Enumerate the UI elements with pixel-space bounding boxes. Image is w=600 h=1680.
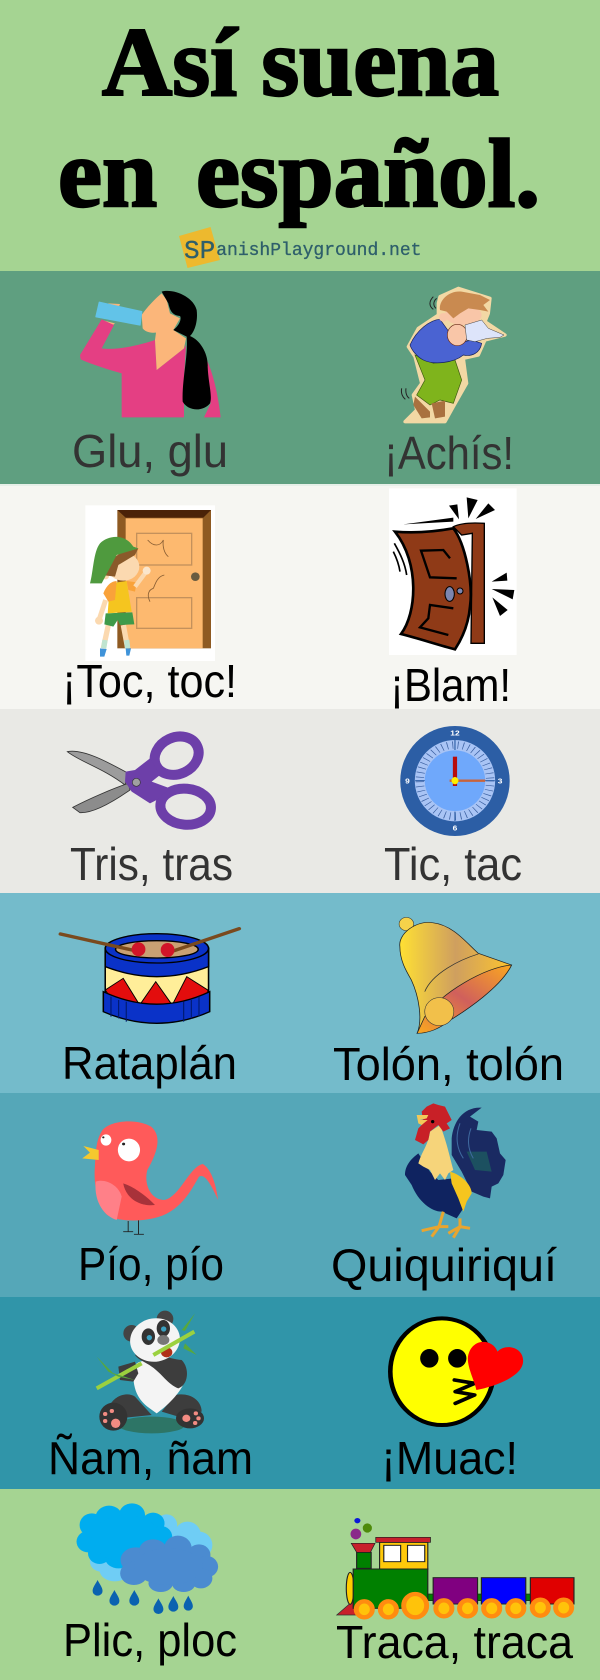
label: Tolón, tolón: Tolón, tolón: [333, 1038, 564, 1090]
panel: row 4 drum and bell: [0, 893, 600, 1093]
icon: drum: [60, 929, 239, 1023]
title: en español.: [58, 120, 540, 228]
panel: row 3 scissors and clock: [0, 709, 600, 893]
panel: row 1 drinking and sneezing: [0, 271, 600, 486]
icon: clock: 3: [498, 777, 503, 785]
icon: toy train: [337, 1518, 574, 1617]
icon: red bird: [82, 1121, 218, 1234]
logo: SpanishPlayground.net: anishPlayground.net: [216, 241, 421, 261]
panel: row 6 panda and kiss: [0, 1297, 600, 1489]
icon: rooster: [405, 1103, 506, 1238]
label: Plic, ploc: Plic, ploc: [63, 1614, 237, 1666]
panel: row 2 knocking and slamming: [0, 486, 600, 711]
label: Tris, tras: Tris, tras: [70, 838, 233, 890]
icon: boy knocking on a door: [85, 505, 215, 661]
icon: scissors: [67, 729, 212, 827]
title: [58, 9, 540, 228]
panel: row 5 bird and rooster: [0, 1093, 600, 1297]
logo: SpanishPlayground.net: SP: [184, 236, 215, 266]
panel: row 7 rain and train: [0, 1489, 600, 1680]
logo: SpanishPlayground.net: [179, 227, 421, 268]
icon: clock: 6: [453, 824, 458, 833]
title: Así suena: [102, 9, 499, 117]
label: Rataplán: Rataplán: [62, 1037, 237, 1089]
label: ¡Blam!: ¡Blam!: [390, 659, 511, 711]
icon: boy sneezing: [401, 288, 505, 422]
label: ¡Achís!: ¡Achís!: [384, 427, 514, 479]
icon: clock: [400, 726, 510, 836]
icon: panda eating bamboo: [97, 1311, 204, 1433]
icon: door slamming: [389, 488, 517, 655]
label: Quiquiriquí: Quiquiriquí: [331, 1239, 557, 1291]
icon: woman drinking from a bottle: [80, 291, 221, 417]
icon: clock: 9: [405, 777, 411, 785]
icon: bell: [399, 917, 512, 1033]
icon: clock: 12: [450, 729, 460, 738]
label: Ñam, ñam: Ñam, ñam: [48, 1432, 253, 1484]
label: Pío, pío: Pío, pío: [78, 1238, 224, 1290]
label: Tic, tac: Tic, tac: [384, 838, 522, 890]
label: ¡Toc, toc!: ¡Toc, toc!: [62, 655, 237, 707]
label: Traca, traca: Traca, traca: [336, 1616, 573, 1668]
label: ¡Muac!: ¡Muac!: [381, 1432, 518, 1484]
panel: header: [0, 0, 600, 271]
icon: rain clouds: [77, 1503, 218, 1614]
label: Glu, glu: Glu, glu: [72, 425, 228, 477]
icon: kissing face with heart: [390, 1318, 523, 1425]
